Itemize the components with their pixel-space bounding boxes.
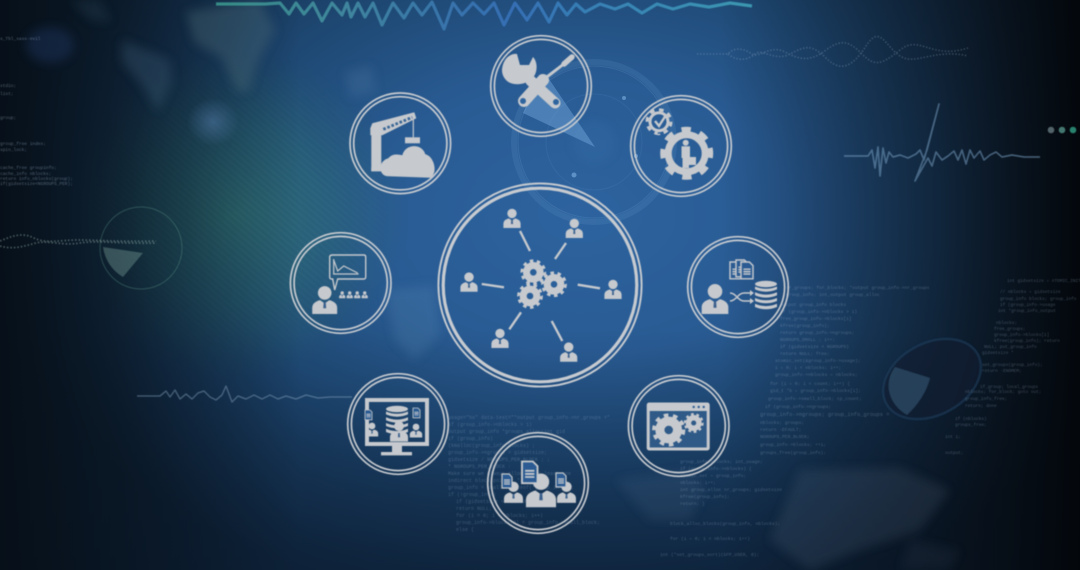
- code block: centre bottom: group_info = kmalloc(sizeof(*group_info));: [448, 485, 574, 491]
- code block: right of centre: if (group_info->ngroups;: [765, 404, 831, 410]
- code block: right of centre: NGROUPS_PER_BLOCK;: [760, 434, 810, 440]
- hub gears: [519, 261, 565, 307]
- main radar dial: [514, 62, 674, 222]
- icon: person, documents, arrows, database: [702, 260, 777, 314]
- code block: top left: group;: [0, 115, 16, 121]
- icon ring: gear with worker: [631, 96, 731, 196]
- code block: right of centre: nblocks; groups;: [760, 420, 804, 426]
- icon ring: data shuffle: [688, 237, 788, 337]
- code block: far right: group_info_free;: [965, 397, 1007, 402]
- code block: top left: list;: [0, 91, 14, 97]
- code block: centre bottom: gidsetsize / NGROUPS_PER_BLOCK ; ;: [448, 457, 550, 463]
- code block: centre bottom: Make sure we always allocate at least one: [448, 471, 571, 477]
- code block: top left: group_free index;: [0, 141, 46, 147]
- code block: right of centre: output group_info blocks: [780, 302, 846, 308]
- icon ring: construction crane and cloud: [350, 93, 451, 194]
- code block: right of centre: nr_groups; for_blocks; *output group_info->nr_groups: [786, 285, 930, 291]
- code block: centre bottom: indirect block pointer */: [448, 478, 523, 484]
- code block: far right: free_groups;: [994, 327, 1026, 332]
- code block: far right: if (group_info->usage: [1000, 303, 1056, 308]
- code block: right of centre: return group_info->ngroups;: [780, 330, 854, 336]
- code block: centre bottom: usage="%s" data-test="*output group_info->nr_groups =": [448, 415, 610, 421]
- hub spokes: [482, 231, 600, 341]
- code block: top left: s_Tbl_sass-evil: [0, 36, 41, 42]
- code block: centre bottom: group_info->blocks[0] = group_info->small_block;: [456, 520, 600, 526]
- code block: right of centre: gid_t *b = group_info->blocks[i];: [770, 388, 861, 394]
- top waveform: [216, 2, 752, 29]
- left lower waveform: [137, 386, 352, 402]
- code block: right of centre: group_info; int_output group_alloc: [786, 292, 880, 298]
- code block: right of centre: [660, 285, 930, 558]
- code block: top left: spin_lock;: [0, 147, 27, 153]
- code block: far right: return; done: [965, 404, 997, 409]
- icon ring: presenter with chart: [290, 233, 391, 333]
- code block: right of centre: return -EFAULT;: [760, 427, 801, 433]
- icon: three people and documents: [502, 462, 576, 507]
- code block: right of centre: NGROUPS_SMALL ; i++;: [780, 337, 835, 343]
- code block: right of centre: kfree(group_info);: [680, 494, 730, 500]
- code block: right of centre: block_alloc_blocks(group_info, nblocks);: [670, 521, 780, 527]
- hub people: [460, 209, 622, 362]
- code block: right of centre: int group_alloc nr_groups; gidsetsize: [680, 487, 782, 493]
- code block: far right: int *group_info_output: [998, 309, 1056, 314]
- code block: right of centre: group_info->blocks; int_usage;: [680, 459, 763, 465]
- icon: browser window with gears: [648, 403, 709, 449]
- code block: far right: set_groups(group_info);: [982, 363, 1043, 368]
- icon ring: monitor with team: [348, 374, 448, 474]
- code block: right of centre: atomic_set(&group_info->usage);: [775, 358, 860, 364]
- code block: far right: output;: [945, 451, 963, 456]
- code block: right of centre: nblocks; i++;: [680, 480, 716, 486]
- code block: far right: return -ENOMEM;: [982, 369, 1022, 374]
- code block: centre bottom: if (!group_info): [448, 492, 496, 498]
- code block: centre bottom: output group_info *groups_alloc(int gid: [448, 429, 565, 435]
- code block: far right: group_info->blocks[i]: [994, 333, 1049, 338]
- code block: top left: if(gidsetsize<NGROUPS_PER);: [0, 181, 73, 187]
- code block: far right: [945, 279, 1080, 456]
- code block: right of centre: if (group_info->nblocks > 1): [780, 309, 857, 315]
- code block: right of centre: group_info->small_block; cp_count;: [768, 396, 862, 402]
- code block: right of centre: i = 0; i < nblocks; i++;: [775, 365, 841, 371]
- code block: centre bottom: if (group_info->nblocks > 1): [448, 422, 532, 428]
- code block: far right: int i;: [945, 435, 961, 440]
- code block: right of centre: free_group_info->blocks[i]: [780, 316, 852, 322]
- icon ring: team with documents: [488, 433, 588, 533]
- code block: right of centre: if (group_info->nblocks) {: [680, 466, 752, 472]
- code block: top left: [0, 36, 73, 187]
- icon ring: tools: [491, 36, 591, 136]
- left radar dial: [100, 207, 182, 289]
- code block: right of centre: int (*set_groups_sort)(GFP_USER, 0);: [660, 552, 759, 558]
- code block: centre bottom: * NGROUPS_PER_BLOCK :: [448, 464, 511, 470]
- icon: wrench and screwdriver: [502, 54, 572, 105]
- code block: right of centre: group_info->ngroups; group_info_groups =: [760, 412, 889, 418]
- right radar dial: [869, 323, 995, 435]
- code block: centre bottom: return NULL;: [456, 506, 492, 512]
- code block: far right: // nblocks = gidsetsize: [1000, 290, 1061, 295]
- code block: far right: gidsetsize *: [982, 351, 1014, 356]
- code block: far right: NULL; put_group_info: [984, 345, 1037, 350]
- icon: crane over cloud: [370, 112, 435, 178]
- code block: right of centre: return; }: [680, 501, 705, 507]
- code block: right of centre: for (i = 0; i < nblocks; i++): [670, 536, 750, 542]
- code block: right of centre: return NULL; free;: [780, 351, 830, 357]
- code block: far right: kfree(group_info); return: [994, 339, 1060, 344]
- status dots: [1048, 127, 1076, 133]
- right waveform: [844, 104, 1040, 181]
- code block: centre bottom: if (gidsetsize <= NGROUPS_SMALL): [456, 499, 552, 505]
- icon: monitor, database and people: [365, 400, 427, 455]
- code block: right of centre: groups_free(group_info);: [760, 450, 826, 456]
- code block: centre bottom: for (i = 0; i < nblocks; i++): [456, 513, 543, 519]
- code block: top left: cache_free groupinfo;: [0, 165, 57, 171]
- top right dotted strand: [697, 37, 968, 66]
- code block: far right: if_group; local_groups: [980, 385, 1038, 390]
- code block: top left: stdio;: [0, 83, 16, 89]
- code block: far right: nblocks; for_block; goto out;: [965, 390, 1041, 395]
- icon: speaker and audience: [312, 255, 368, 314]
- code block: right of centre: group_info->blocks; ++i;: [760, 442, 826, 448]
- code block: centre bottom: else {: [456, 527, 474, 533]
- central hub: [438, 183, 642, 387]
- code block: right of centre: kfree(group_info);: [780, 323, 830, 329]
- code block: right of centre: atomic_set = group_info;: [680, 473, 746, 479]
- code block: right of centre: group_info->nblocks = nblocks;: [775, 372, 858, 378]
- icon ring: application window: [628, 376, 729, 476]
- code block: right of centre: if (gidsetsize < NGROUPS): [780, 344, 849, 350]
- code block: far right: groups_free;: [955, 423, 987, 428]
- icon: large gear and check gear: [647, 110, 711, 177]
- code block: right of centre: for (i = 0; i < count; i++) {: [770, 381, 850, 387]
- code block: centre bottom: if (group_info): [448, 436, 493, 442]
- code block: top left: cache_info nblocks;: [0, 171, 51, 177]
- code block: top left: return info_nblocks(group);: [0, 176, 73, 182]
- code block: centre bottom: group_info->ngroups = gidsetsize;: [448, 450, 547, 456]
- code block: far right: group_info blocks; group_info: [1000, 297, 1077, 302]
- code block: centre bottom: [448, 415, 610, 533]
- code block: centre bottom: (kmalloc(group_info_blocks) ;: [448, 443, 535, 449]
- code block: far right: if (nblocks): [955, 417, 987, 422]
- code block: far right: nblocks;: [996, 321, 1017, 326]
- left dotted strand: [0, 235, 156, 248]
